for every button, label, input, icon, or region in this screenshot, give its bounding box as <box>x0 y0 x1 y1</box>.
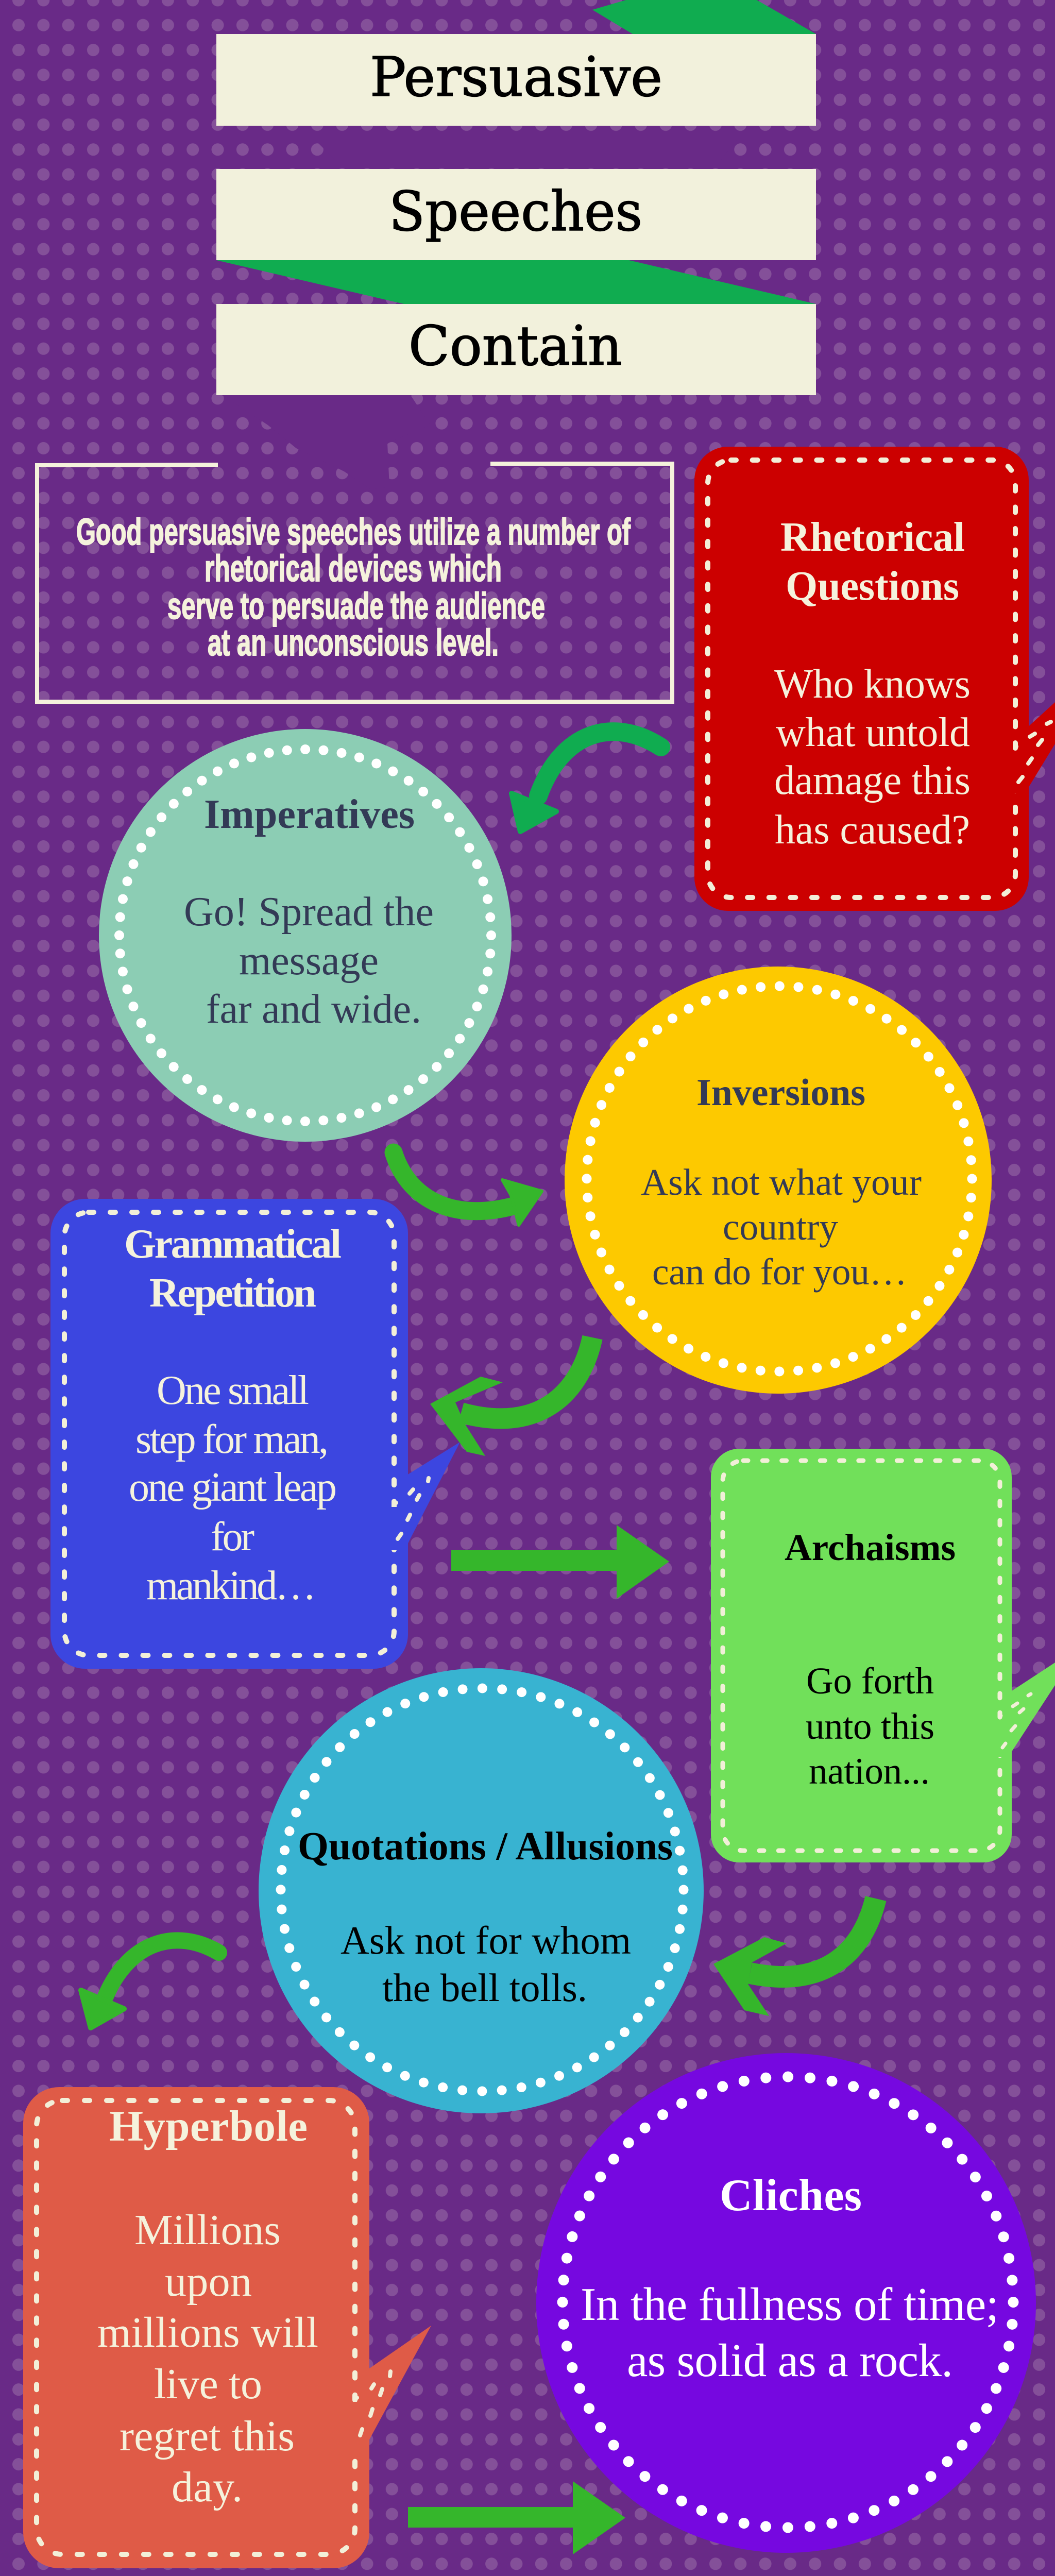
panel: imperatives: far and wide. <box>206 987 421 1032</box>
panel: hyperbole <box>23 2087 431 2568</box>
title banner: Contain <box>409 314 622 378</box>
panel: introduction: at an unconscious level. <box>208 622 499 664</box>
panel: hyperbole: regret this <box>120 2412 295 2460</box>
arrow: quotations to hyperbole <box>81 1940 219 2028</box>
panel: grammatical repetition <box>50 1199 460 1669</box>
panel: imperatives: message <box>239 938 379 984</box>
panel: grammatical repetition: for <box>211 1514 254 1560</box>
panel: cliches: Cliches <box>720 2171 862 2221</box>
panel: hyperbole: upon <box>165 2258 252 2306</box>
panel: rhetorical questions: Who knows <box>774 662 971 707</box>
panel: archaisms: nation... <box>809 1750 930 1792</box>
title banner: Speeches <box>389 180 642 243</box>
panel: quotations and allusions: the bell tolls. <box>382 1965 587 2010</box>
panel: rhetorical questions: has caused? <box>775 807 970 853</box>
panel: introduction: serve to persuade the audience <box>167 586 545 627</box>
panel: hyperbole: live to <box>154 2360 262 2408</box>
panel: cliches: In the fullness of time; <box>581 2278 999 2330</box>
panel: inversions: Inversions <box>696 1072 865 1114</box>
panel: cliches <box>536 2053 1036 2553</box>
title banner: Persuasive <box>370 45 662 109</box>
panel: grammatical repetition: one giant leap <box>129 1465 337 1510</box>
panel: grammatical repetition: Repetition <box>149 1270 316 1316</box>
panel: quotations and allusions <box>259 1668 704 2113</box>
arrow: hyperbole to cliches <box>408 2481 625 2554</box>
panel: hyperbole: Millions <box>134 2206 281 2254</box>
panel: introduction <box>37 464 672 702</box>
panel: grammatical repetition: One small <box>157 1368 309 1413</box>
panel: hyperbole: Hyperbole <box>109 2102 308 2150</box>
panel: archaisms: unto this <box>806 1705 934 1747</box>
panel: cliches: as solid as a rock. <box>627 2334 953 2386</box>
panel: archaisms: Archaisms <box>785 1527 956 1568</box>
arrow: inversions to grammatical repetition <box>430 1337 592 1456</box>
panel: imperatives: Imperatives <box>204 792 415 837</box>
panel: rhetorical questions <box>694 447 1055 911</box>
panel: grammatical repetition: step for man, <box>135 1417 329 1462</box>
panel: grammatical repetition: mankind… <box>146 1563 316 1608</box>
arrow: imperatives to inversions <box>394 1153 542 1225</box>
panel: archaisms <box>711 1449 1055 1862</box>
panel: introduction: rhetorical devices which <box>205 548 502 589</box>
panel: rhetorical questions: damage this <box>774 758 971 803</box>
panel: inversions: Ask not what your <box>641 1161 922 1203</box>
panel: hyperbole: millions will <box>97 2309 318 2357</box>
panel: rhetorical questions: Questions <box>786 564 959 609</box>
panel: quotations and allusions: Ask not for whom <box>341 1918 631 1962</box>
panel: inversions: can do for you… <box>652 1251 907 1293</box>
panel: imperatives: Go! Spread the <box>184 889 434 935</box>
panel: inversions <box>565 967 992 1394</box>
panel: archaisms: Go forth <box>806 1660 934 1702</box>
arrow: grammatical repetition to archaisms <box>451 1525 669 1599</box>
panel: rhetorical questions: Rhetorical <box>780 515 965 560</box>
panel: hyperbole: day. <box>172 2463 243 2511</box>
panel: rhetorical questions: what untold <box>776 710 970 755</box>
arrow: rhetorical questions to imperatives <box>512 732 661 832</box>
panel: imperatives <box>99 729 512 1142</box>
panel: quotations and allusions: Quotations / Allusions <box>298 1824 673 1868</box>
panel: grammatical repetition: Grammatical <box>124 1222 342 1267</box>
title banner <box>216 0 816 395</box>
panel: inversions: country <box>723 1206 838 1248</box>
panel: introduction: Good persuasive speeches utilize a number of <box>76 512 631 553</box>
arrow: archaisms to quotations <box>713 1899 876 2016</box>
